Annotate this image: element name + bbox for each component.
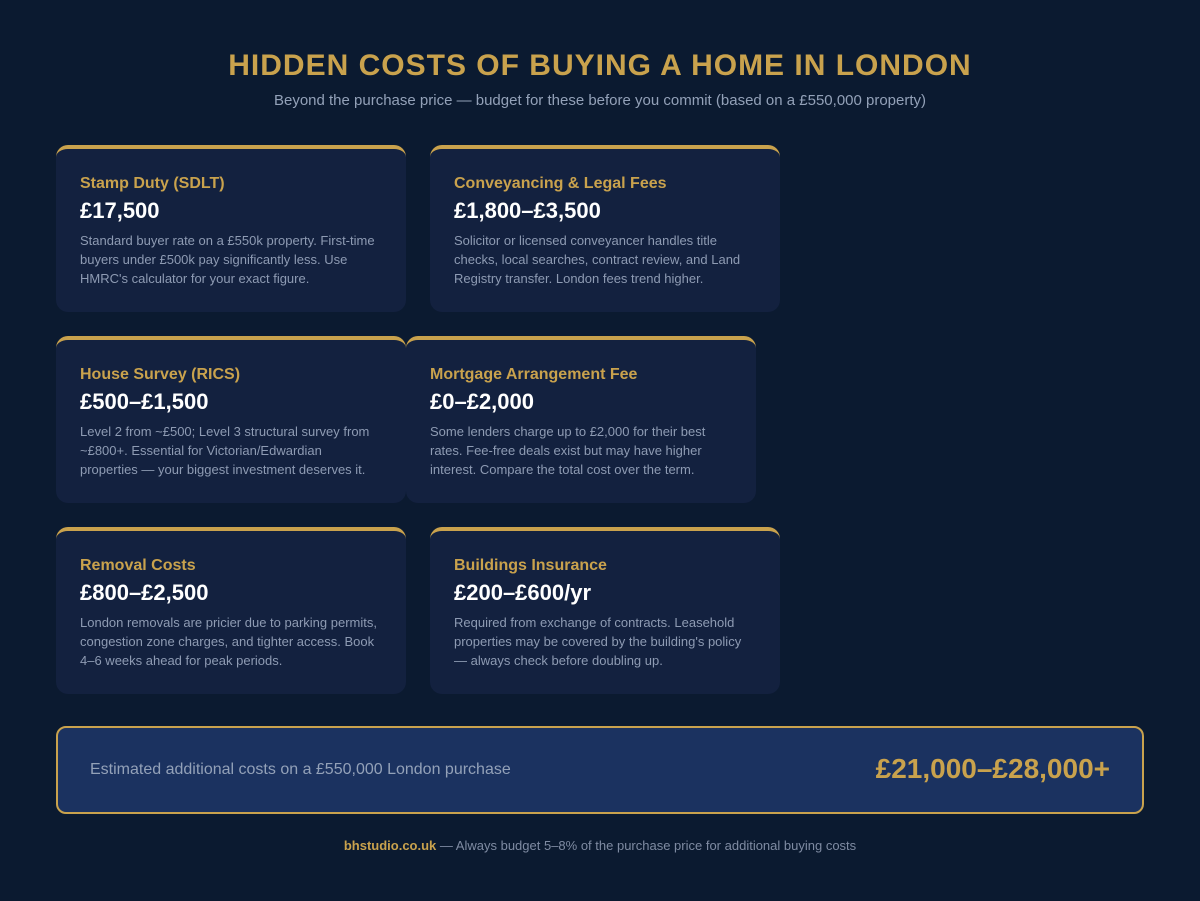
card: stamp duty: Stamp Duty (SDLT) [80,175,225,192]
card: mortgage fee [406,336,756,503]
summary box: £21,000–£28,000+ [876,753,1110,784]
summary box: Estimated additional costs on a £550,000 London purchase [90,761,511,778]
card: insurance: Required from exchange of contracts. Leasehold properties may be covered by the building's policy — always check before doubling up. [454,615,741,668]
subtitle: Beyond the purchase price — budget for these before you commit (based on a £550,000 property) [274,92,926,109]
card: stamp duty: Standard buyer rate on a £550k property. First-time buyers under £500k pay significantly less. Use HMRC's calculator for your exact figure. [80,233,375,286]
card: insurance: Buildings Insurance [454,557,607,574]
card: conveyancing: Solicitor or licensed conveyancer handles title checks, local searches, contract review, and Land Registry transfer. London fees trend higher. [454,233,740,286]
card: conveyancing [430,145,780,312]
card: survey [56,336,406,503]
card: insurance [430,527,780,694]
card: conveyancing: Conveyancing & Legal Fees [454,175,667,192]
card: removal [56,527,406,694]
card: mortgage fee: Some lenders charge up to £2,000 for their best rates. Fee-free deals exist but may have higher interest. Compare the total cost over the term. [430,424,705,477]
title: HIDDEN COSTS OF BUYING A HOME IN LONDON [228,49,972,82]
card: survey: £500–£1,500 [80,389,208,414]
card: removal: Removal Costs [80,557,196,574]
card: insurance: £200–£600/yr [454,580,591,605]
card: stamp duty [56,145,406,312]
summary box [56,726,1144,814]
card: survey: Level 2 from ~£500; Level 3 structural survey from ~£800+. Essential for Victorian/Edwardian properties — your biggest investment deserves it. [80,424,369,477]
card: removal: London removals are pricier due to parking permits, congestion zone charges, and tighter access. Book 4–6 weeks ahead for peak periods. [80,615,377,668]
card: conveyancing: £1,800–£3,500 [454,198,601,223]
card: survey: House Survey (RICS) [80,366,240,383]
card: mortgage fee: £0–£2,000 [430,389,534,414]
card: stamp duty: £17,500 [80,198,160,223]
card: removal: £800–£2,500 [80,580,208,605]
footer: bhstudio.co.uk — Always budget 5–8% of the purchase price for additional buying costs [344,838,856,853]
card: mortgage fee: Mortgage Arrangement Fee [430,366,637,383]
